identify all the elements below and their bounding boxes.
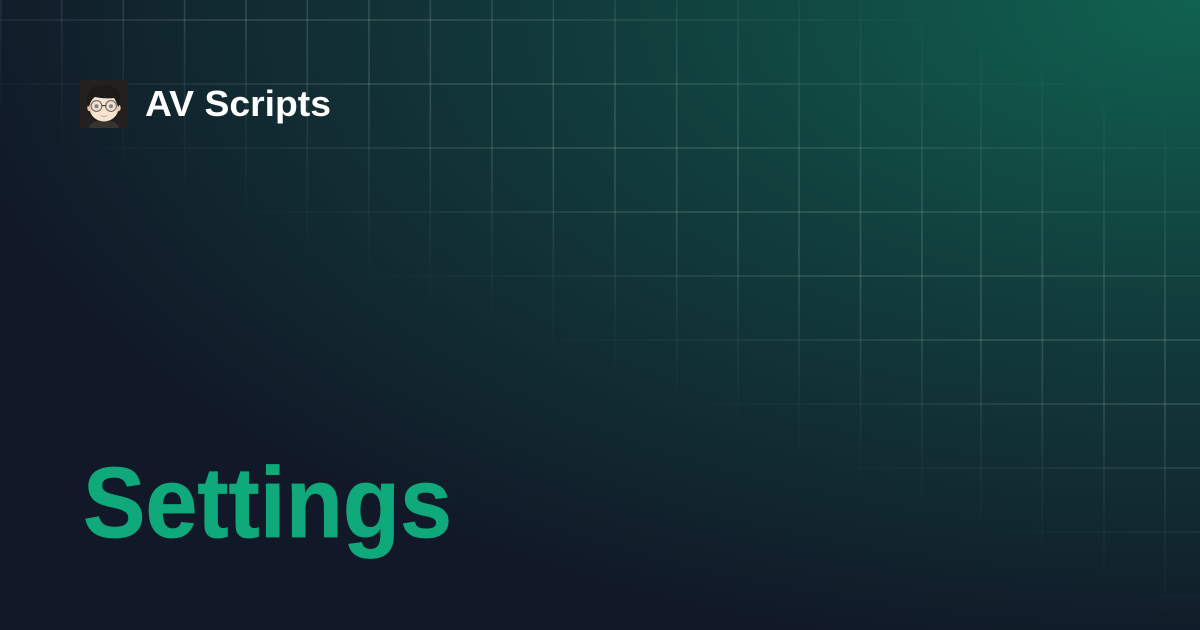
page title: Settings: [83, 447, 452, 559]
icon: cartoon avatar: [80, 80, 128, 128]
brand name: AV Scripts: [145, 83, 331, 124]
